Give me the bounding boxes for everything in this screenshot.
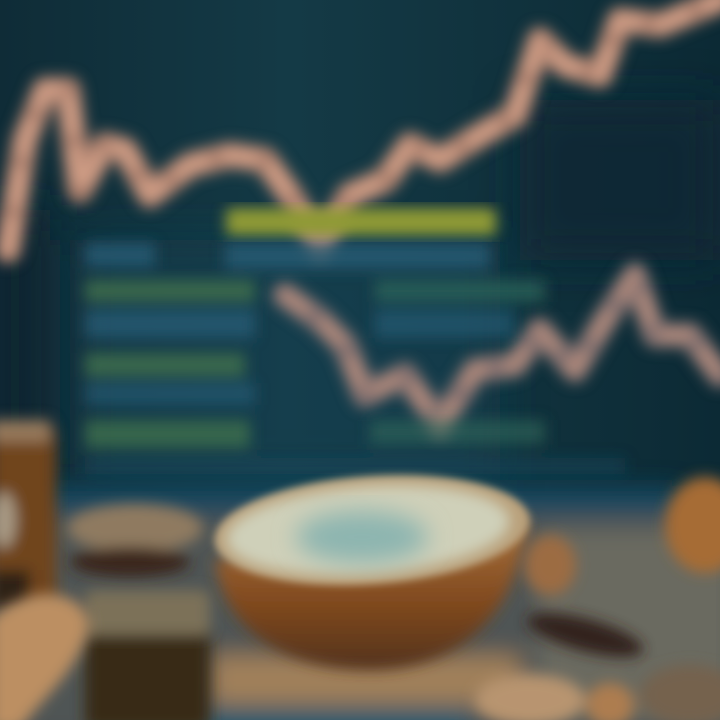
table surface — [0, 488, 720, 720]
wall shading — [0, 100, 720, 500]
left back bowl — [67, 504, 203, 577]
front glass — [85, 590, 210, 720]
right orange fruit — [665, 477, 720, 573]
blurred table: text rows — [85, 243, 625, 474]
bowl — [211, 465, 533, 670]
left cup — [0, 420, 56, 610]
right scattered nuts — [475, 535, 720, 720]
left front pastry — [0, 594, 90, 720]
bowl rim — [211, 465, 533, 595]
upper chart line — [8, 0, 720, 250]
bowl body — [215, 520, 528, 670]
bowl water highlight — [296, 511, 428, 563]
blurred table: heading bar — [226, 208, 496, 236]
lower chart line — [285, 275, 720, 425]
bowl milk — [223, 476, 513, 584]
